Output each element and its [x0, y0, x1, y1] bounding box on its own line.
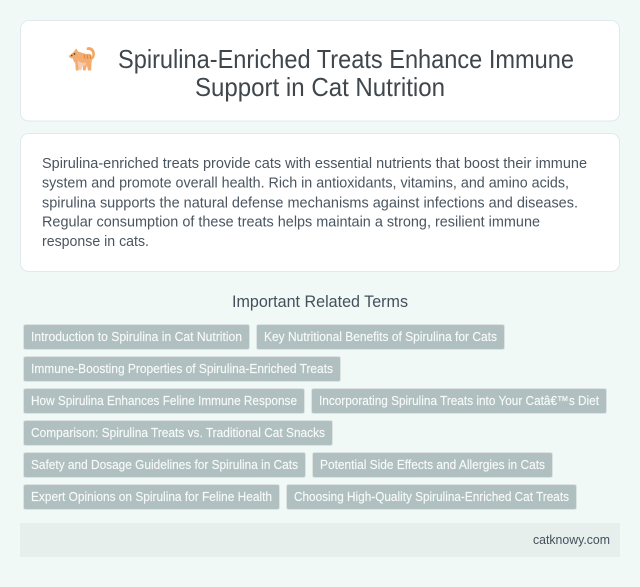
tag — [24, 324, 250, 350]
tag: Expert Opinions on Spirulina for Feline Health — [31, 489, 272, 504]
tag — [312, 388, 606, 414]
tag: Key Nutritional Benefits of Spirulina for Cats — [264, 329, 497, 344]
tag: Comparison: Spirulina Treats vs. Traditional Cat Snacks — [31, 425, 325, 440]
tag — [256, 324, 504, 350]
tag: Safety and Dosage Guidelines for Spirulina in Cats — [31, 457, 298, 472]
title: Spirulina-Enriched Treats Enhance Immune — [118, 44, 574, 74]
tag: Immune-Boosting Properties of Spirulina-Enriched Treats — [31, 361, 333, 376]
text block: description: response in cats. — [42, 233, 149, 250]
panel: title card — [20, 20, 620, 121]
text block: description — [42, 155, 587, 250]
footer — [20, 523, 620, 557]
tag — [24, 484, 280, 510]
tag: Choosing High-Quality Spirulina-Enriched Cat Treats — [294, 489, 569, 504]
text block: description: system and promote overall health. Rich in antioxidants, vitamins, and amino acids, — [42, 175, 569, 192]
panel: tags — [24, 324, 606, 510]
footer: catknowy.com — [533, 532, 610, 547]
text block: description: Spirulina-enriched treats provide cats with essential nutrients that boost their immune — [42, 155, 587, 172]
tag — [24, 452, 306, 478]
panel: description — [20, 134, 620, 272]
icon: cat — [69, 47, 95, 70]
title — [118, 44, 574, 102]
tag: How Spirulina Enhances Feline Immune Response — [31, 393, 297, 408]
tag — [312, 452, 552, 478]
tag — [24, 388, 304, 414]
tag — [24, 356, 340, 382]
text block: description: Regular consumption of these treats helps maintain a strong, resilient immune — [42, 214, 540, 230]
tag: Potential Side Effects and Allergies in Cats — [320, 457, 545, 472]
heading: related terms: Important Related Terms — [232, 293, 408, 311]
tag: Incorporating Spirulina Treats into Your Catâ€™s Diet — [319, 393, 599, 408]
tag: Introduction to Spirulina in Cat Nutrition — [31, 329, 242, 344]
title: Support in Cat Nutrition — [195, 72, 445, 102]
tag — [286, 484, 576, 510]
tag — [24, 420, 332, 446]
text block: description: spirulina supports the natural defense mechanisms against infections and diseases. — [42, 194, 578, 211]
